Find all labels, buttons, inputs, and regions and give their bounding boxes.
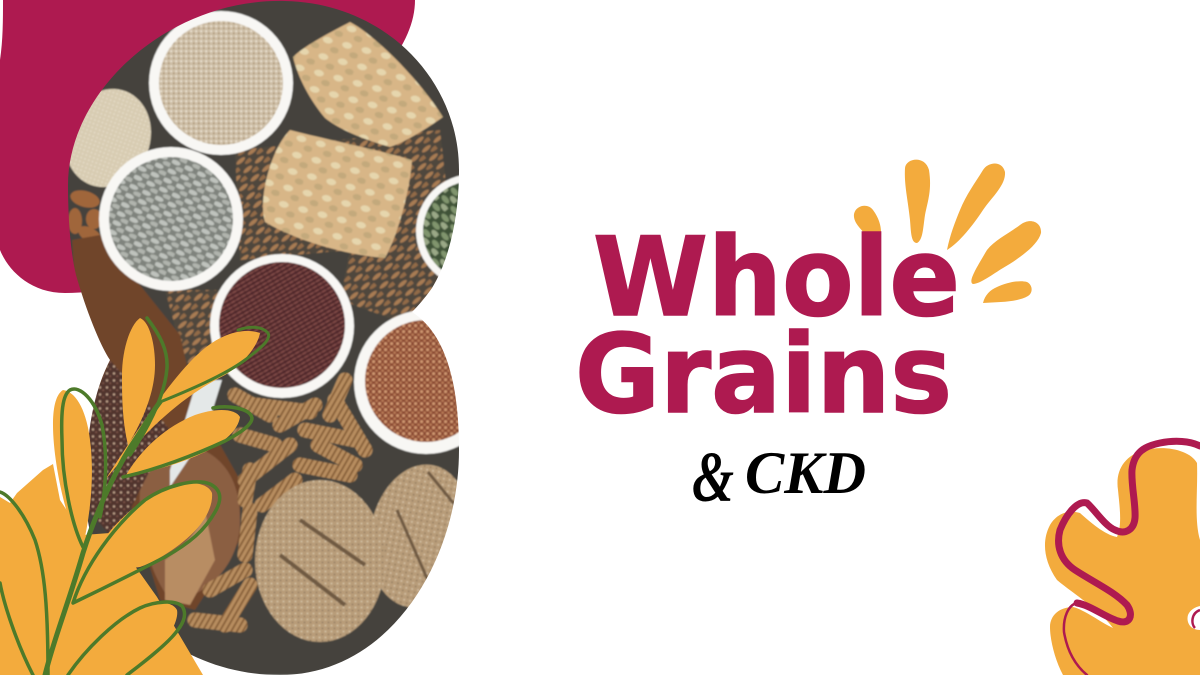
title line: Grains: Grains — [575, 311, 952, 438]
round bread large — [255, 480, 385, 642]
plant leaves: orange fills — [53, 318, 260, 675]
dark table background — [60, 0, 465, 675]
bread roll top — [293, 22, 443, 147]
bread roll middle — [263, 130, 412, 258]
leaf fill — [1045, 448, 1200, 675]
fusilli pasta — [195, 380, 365, 625]
leaf outline — [1059, 441, 1200, 622]
orange base shape bottom-left — [0, 464, 203, 675]
food photo in figure-eight shape — [68, 0, 459, 675]
almonds — [68, 190, 100, 239]
bowl: oats — [149, 11, 293, 155]
crimson blob — [0, 0, 415, 293]
sliced bread — [69, 88, 152, 188]
wooden board — [72, 235, 240, 610]
CKD: CKD — [745, 440, 866, 506]
leaf outline right tip — [1192, 610, 1200, 628]
bowl: sunflower seeds — [99, 147, 243, 291]
scattered grains — [166, 129, 446, 364]
ampersand: & — [692, 437, 734, 517]
decorative leaf bottom-right — [1045, 441, 1200, 675]
title — [575, 214, 960, 438]
round bread right — [373, 464, 458, 608]
bowl: red rice — [210, 254, 354, 398]
subtitle — [692, 437, 866, 517]
title line: Whole: Whole — [593, 214, 960, 341]
bowl: pumpkin seeds — [414, 174, 459, 278]
plant: green stem and leaf outlines — [0, 318, 269, 675]
leaf outline taper — [1064, 603, 1087, 675]
accent burst behind title — [854, 160, 1041, 303]
seeded loaf — [85, 360, 170, 535]
bowl: buckwheat — [352, 310, 459, 456]
